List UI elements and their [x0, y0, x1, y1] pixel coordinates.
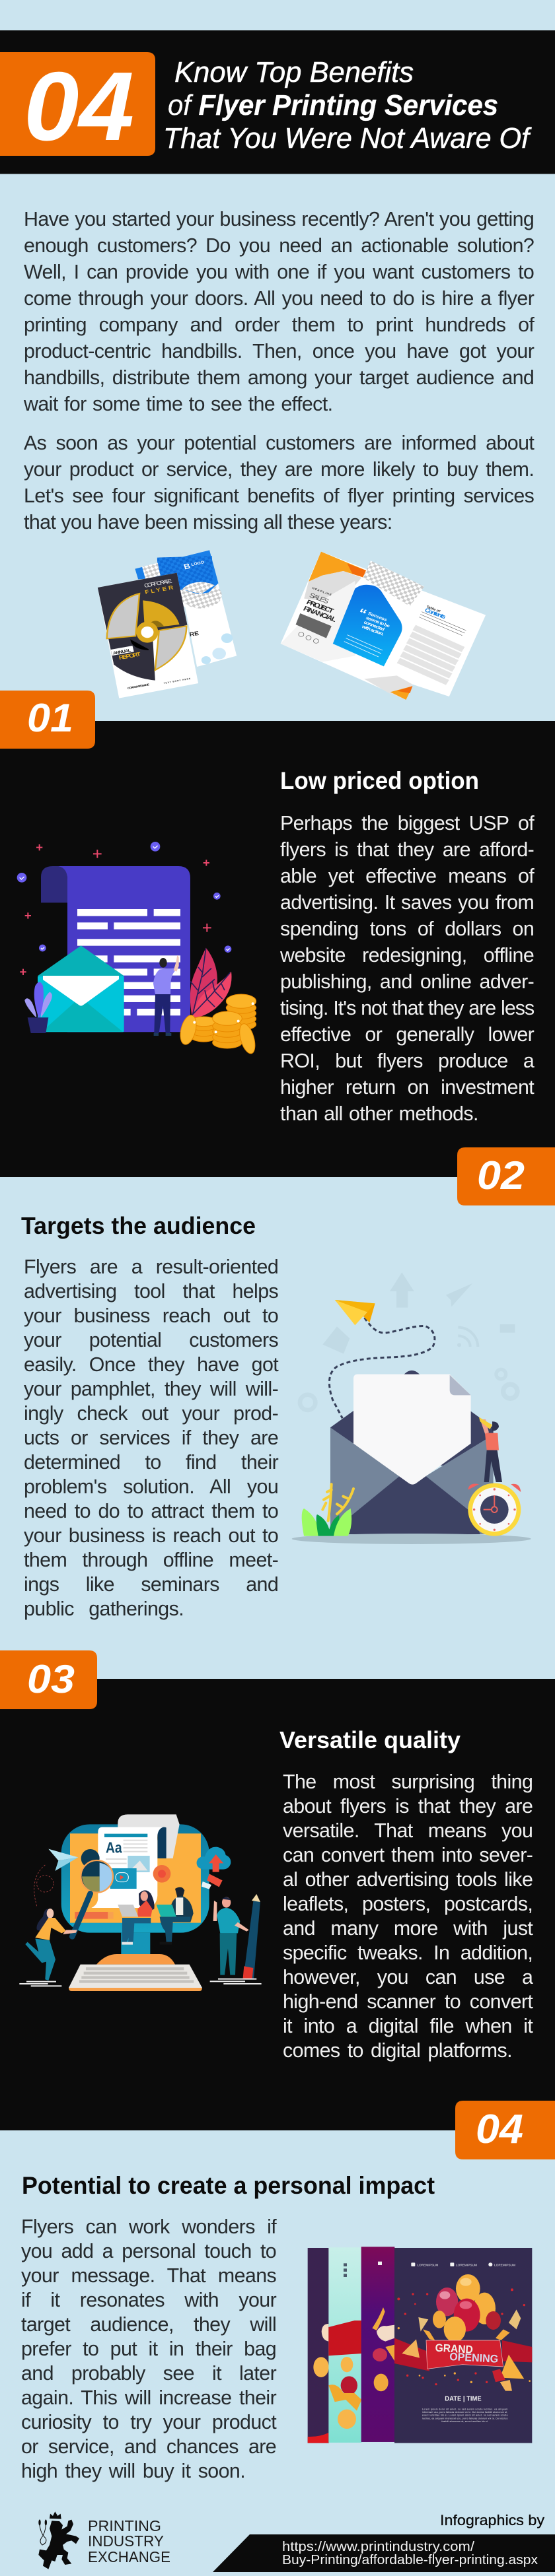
body: low priced option: advertising. It saves you from — [280, 891, 534, 914]
title text: of Flyer Printing Services — [168, 89, 498, 121]
body: targets the audience: public gatherings. — [24, 1597, 184, 1620]
body: personal impact: or service, and chances are — [21, 2435, 276, 2458]
front corporate flyer: REPORT — [118, 651, 141, 661]
brochure illustration: “ — [355, 605, 369, 622]
body: personal impact: you add a personal touch to — [21, 2239, 276, 2262]
logo wordmark: INDUSTRY — [88, 2532, 164, 2550]
badge 01: 01 — [27, 696, 73, 740]
body: versatile quality: specific tweaks. In addition, — [283, 1941, 533, 1964]
icon: document roll: Aa — [106, 1839, 122, 1856]
intro paragraph 1 — [24, 207, 535, 415]
badge 04 — [455, 2101, 555, 2159]
body: targets the audience: need to do to attract them to — [24, 1499, 278, 1522]
body: versatile quality: The most surprising thing — [283, 1770, 533, 1793]
intro paragraph 2: your product or service, they are more likely to buy them. — [24, 458, 534, 481]
icon: potted plant — [24, 982, 52, 1033]
megaphones — [402, 2339, 524, 2391]
flyer samples illustration — [98, 550, 237, 698]
body: personal impact: if it resonates with your — [21, 2288, 276, 2311]
flyer text: fastidii atomorum at, exerci ancillae his ei. — [441, 2420, 488, 2423]
body: targets the audience: your potential customers — [24, 1328, 278, 1351]
body: targets the audience — [24, 1255, 279, 1620]
icon: teal envelope — [38, 945, 124, 1032]
icon: man holding pencil — [213, 1894, 260, 1979]
icon: paper plane — [48, 1849, 78, 1871]
logo wordmark: EXCHANGE — [88, 2548, 170, 2565]
icon: gold coin stacks — [178, 994, 258, 1055]
badge 03: 03 — [27, 1657, 75, 1701]
front corporate flyer: CORPORATE NAME — [127, 683, 149, 690]
balloons — [433, 2274, 501, 2342]
body: versatile quality: about flyers is that they are — [283, 1794, 533, 1817]
brochure illustration: FINANCIAL — [302, 605, 338, 624]
body: targets the audience: your business reach out to — [24, 1304, 278, 1327]
badge 03 — [0, 1650, 97, 1709]
brochure illustration: Table of — [426, 605, 441, 613]
icon: open envelope — [330, 1371, 494, 1534]
body: targets the audience: ings like seminars and — [24, 1573, 278, 1596]
body: targets the audience: ucts or services if they are — [24, 1426, 278, 1449]
body: low priced option — [280, 811, 535, 1125]
flyer text: DATE | TIME — [445, 2396, 482, 2403]
body: low priced option: than all other methods. — [280, 1102, 478, 1125]
title text: Know Top Benefits — [174, 56, 414, 88]
front corporate flyer: CORPORATE — [143, 578, 172, 589]
flyer text: exerci ancillae his ei. Lorem ipsum dolor sit amet, no sed autem soluta — [422, 2414, 507, 2417]
badge 02 — [457, 1147, 555, 1205]
body: personal impact: and probably see it later — [21, 2361, 276, 2385]
body: low priced option: Perhaps the biggest USP of — [280, 811, 534, 834]
body: targets the audience: easily. Once they have got — [24, 1353, 278, 1376]
body: low priced option: tising. It's not that they are less — [280, 996, 534, 1019]
icon: magnifying glass — [72, 1849, 113, 1936]
body: versatile quality — [283, 1770, 533, 2062]
icon: man on alarm clock — [468, 1417, 521, 1536]
footer url bar — [213, 2534, 555, 2572]
intro paragraph 2: As soon as your potential customers are informed about — [24, 431, 534, 454]
icon: sitting woman with laptop — [118, 1890, 155, 1945]
icon: person pointing at document — [153, 955, 179, 1036]
icon: heraldic lion — [38, 2511, 79, 2569]
front corporate flyer: FLYER — [144, 584, 174, 595]
body: versatile quality: comes to digital platforms. — [283, 2039, 511, 2062]
icon: scroll document — [41, 866, 190, 1032]
intro paragraph 1: wait for some time to see the effect. — [24, 392, 332, 415]
back blue flyer — [135, 550, 237, 667]
flyer text: LOREMIPSUM — [417, 2263, 438, 2267]
body: personal impact: Flyers can work wonders if — [21, 2215, 276, 2238]
back blue flyer: RE — [189, 630, 200, 638]
brochure illustration: with action. — [360, 623, 385, 637]
logo wordmark: PRINTING — [88, 2517, 161, 2534]
brochure illustration: Contents — [424, 607, 447, 621]
brochure illustration: Success — [367, 611, 388, 623]
front corporate flyer — [98, 573, 198, 698]
body: targets the audience: your pamphlet, they will will- — [24, 1377, 278, 1400]
logo: printing industry exchange — [38, 2511, 170, 2569]
body: targets the audience: ingly check out your prod- — [24, 1402, 278, 1425]
body: versatile quality: al other advertising tools like — [283, 1868, 533, 1891]
body: personal impact — [21, 2215, 277, 2482]
flyer text: LOREMIPSUM — [494, 2263, 515, 2267]
brochure illustration: PROJECT — [305, 599, 335, 615]
intro paragraph 2: Let's see four significant benefits of flyer printing services — [24, 484, 534, 507]
dashed flight path — [329, 1318, 435, 1418]
body: targets the audience: advertising tool that helps — [24, 1279, 278, 1303]
brochure illustration: SALES — [308, 592, 330, 605]
intro paragraph 2 — [24, 431, 535, 533]
main flyer — [394, 2248, 532, 2443]
badge 04: 04 — [476, 2107, 523, 2152]
heading: potential to create a personal impact: Potential to create a personal impact — [22, 2172, 435, 2199]
body: versatile quality: however, you can use a — [283, 1965, 533, 1988]
intro paragraph 1: come through your doors. All you need to do is hire a flyer — [24, 287, 534, 310]
body: low priced option: flyers is that they are afford- — [280, 838, 534, 861]
body: low priced option: website redesigning, offline — [280, 943, 534, 966]
body: versatile quality: leaflets, posters, postcards, — [283, 1892, 533, 1915]
body: low priced option: higher return on investment — [280, 1075, 534, 1099]
title text — [163, 56, 533, 154]
intro paragraph 1: handbills, distribute them among your target audience and — [24, 366, 534, 389]
body: targets the audience: Flyers are a result-oriented — [24, 1255, 278, 1278]
intro paragraph 1: Well, I can provide you with one if you want customers to — [24, 260, 534, 283]
dashed orbit — [34, 1865, 54, 1907]
intro paragraph 1: Have you started your business recently? Aren't you getting — [24, 207, 534, 230]
body: personal impact: your message. That means — [21, 2264, 276, 2287]
confetti poppers — [418, 2309, 521, 2340]
body: versatile quality: it into a digital file when it — [283, 2014, 533, 2037]
faint background icons — [300, 1272, 517, 1410]
body: personal impact: curiosity to try your product — [21, 2410, 276, 2433]
brochure illustration: connected — [363, 619, 386, 632]
icon: search bar — [75, 1912, 114, 1919]
back blue flyer: B — [182, 562, 192, 571]
heading: versatile quality: Versatile quality — [279, 1726, 461, 1753]
icon: sitting man with laptop — [157, 1887, 194, 1945]
badge 02: 02 — [477, 1153, 525, 1198]
section 1 dark panel — [0, 721, 555, 1177]
heading: low priced option: Low priced option — [280, 767, 479, 794]
section 3 dark panel — [0, 1679, 555, 2130]
body: low priced option: effective or generally lower — [280, 1023, 534, 1046]
ground shadow — [292, 1534, 531, 1544]
front corporate flyer: ANNUAL — [112, 648, 132, 656]
illustration: monitor and team — [19, 1814, 262, 1991]
flyer text: LOREMIPSUM — [456, 2263, 477, 2267]
body: low priced option: publishing, and online adver- — [280, 970, 534, 993]
intro paragraph 2: that you have been missing all these years: — [24, 510, 392, 533]
body: low priced option: ROI, but flyers produce a — [280, 1049, 534, 1072]
icon: sparkles and checks — [17, 842, 231, 975]
body: versatile quality: can convert them into sever- — [283, 1843, 533, 1866]
heading: targets the audience: Targets the audience — [21, 1212, 256, 1239]
body: versatile quality: high-end scanner to convert — [283, 1990, 533, 2013]
icon: monitor — [61, 1824, 209, 1965]
body: low priced option: spending tons of dollars on — [280, 917, 534, 940]
flyer text: interesset usu, porro fabulas dolorum vix te. Dui doctus fastidii atomorum at, — [422, 2411, 507, 2414]
back flyer panel dark — [308, 2248, 329, 2443]
icon: plant — [302, 1484, 353, 1536]
logo wordmark — [88, 2517, 170, 2565]
body: versatile quality: and many more with just — [283, 1916, 533, 1940]
orange number badge: 04 — [24, 52, 134, 161]
credit label: Infographics by — [440, 2512, 544, 2528]
body: personal impact: high they will buy it soon. — [21, 2459, 245, 2482]
icon: pink leaves — [190, 948, 232, 1018]
brochure illustration: HEADLINE — [312, 586, 332, 596]
footer url bar: Buy-Printing/affordable-flyer-printing.aspx — [282, 2553, 538, 2567]
icon: document roll — [91, 1814, 180, 1908]
flyer text: lucilius, ea aliquam interesset usu, porro fabulas dolorum vix te. Dui doctus — [422, 2417, 508, 2420]
title text: That You Were Not Aware Of — [163, 122, 533, 154]
back blue flyer: LOGO — [191, 560, 205, 567]
ground strokes — [19, 1979, 262, 1986]
brochure illustration — [281, 552, 486, 700]
back flyer panel mint — [328, 2247, 361, 2443]
intro paragraph 1: printing company and order them to print hundreds of — [24, 313, 534, 336]
icon: keyboard — [69, 1965, 202, 1991]
footer url bar: https://www.printindustry.com/ — [282, 2540, 474, 2554]
brochure illustration: seems to be — [365, 615, 391, 628]
front corporate flyer: TEXT BODY HERE — [163, 677, 192, 685]
flyer text: Lorem ipsum dolor sit amet, no sed autem soluta lucilius, ea aliquam — [422, 2408, 508, 2410]
icon: cloud upload and mail — [197, 1847, 231, 1889]
illustration: grand opening flyers — [308, 2247, 532, 2443]
intro paragraph 1: product-centric handbills. Then, once you have got your — [24, 339, 534, 362]
intro paragraph 1: enough customers? Do you need an actionable solution? — [24, 234, 534, 257]
icon: running woman — [25, 1909, 77, 1981]
body: targets the audience: your business is reach out to — [24, 1524, 278, 1547]
illustration: scroll, envelope and coins — [17, 842, 258, 1055]
title banner — [0, 30, 555, 174]
illustration: envelope with paper plane — [292, 1272, 531, 1544]
ribbon — [394, 2338, 532, 2371]
body: targets the audience: problem's solution. All you — [24, 1475, 278, 1498]
ribbon: OPENING — [449, 2350, 499, 2365]
body: versatile quality: versatile. That means you — [283, 1819, 533, 1842]
body: personal impact: again. This will increase their — [21, 2386, 276, 2409]
body: targets the audience: determined to find their — [24, 1450, 278, 1474]
badge 01 — [0, 691, 95, 749]
body: personal impact: target audience, they will — [21, 2313, 276, 2336]
icon: yellow paper plane — [335, 1300, 375, 1325]
ribbon: GRAND — [435, 2342, 473, 2356]
body: targets the audience: them through offline meet- — [24, 1548, 278, 1571]
back flyer panel purple — [361, 2247, 394, 2442]
body: personal impact: prefer to put it in their bag — [21, 2337, 276, 2360]
body: low priced option: able yet effective means of — [280, 864, 534, 887]
flyer text — [411, 2262, 515, 2423]
